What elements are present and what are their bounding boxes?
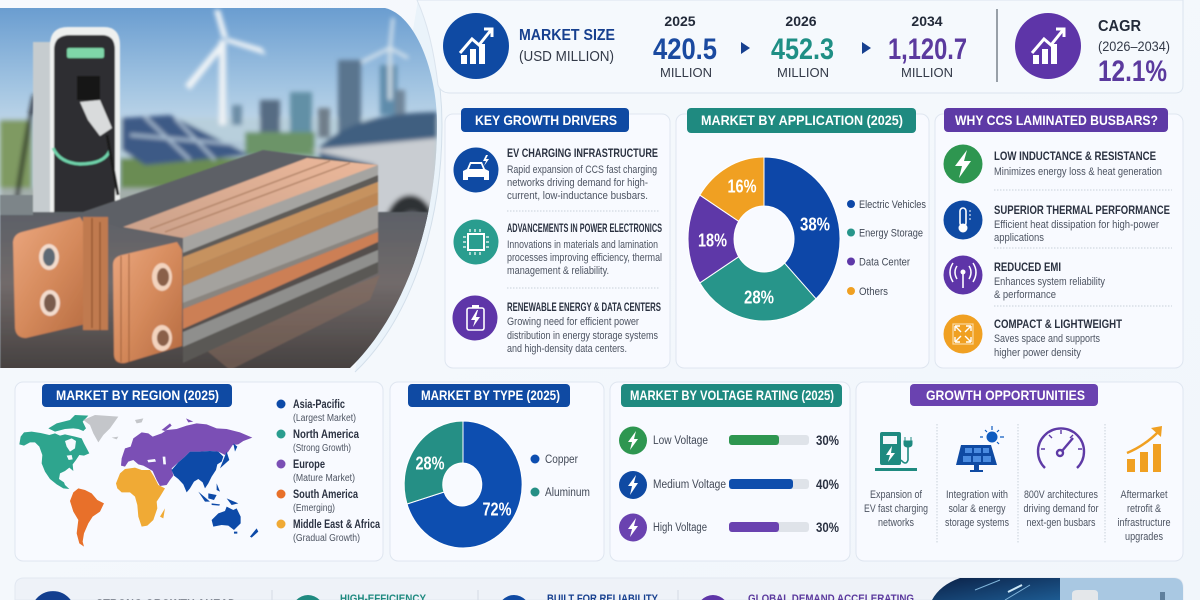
panel: bottom highlights strip xyxy=(15,578,1183,600)
benefit: low inductance: Minimizes energy loss & heat generation xyxy=(994,166,1162,178)
legend xyxy=(847,199,926,298)
value 2025: MILLION xyxy=(660,65,712,80)
legend: (Mature Market) xyxy=(293,473,355,484)
value 2034: MILLION xyxy=(901,65,953,80)
icon: growth bars xyxy=(1127,426,1162,472)
icon: antenna xyxy=(944,256,982,294)
heading xyxy=(621,384,842,407)
opportunity: solar integration: Integration with xyxy=(946,489,1008,501)
heading: MARKET BY REGION (2025) xyxy=(56,387,219,403)
icon: market size chart xyxy=(443,13,509,79)
heading xyxy=(461,108,629,132)
legend: Asia-Pacific xyxy=(293,397,345,411)
benefit: reduced EMI: REDUCED EMI xyxy=(994,262,1061,274)
value 2026 xyxy=(771,13,834,80)
icon: solar panel xyxy=(956,426,1004,472)
donut chart: 38% xyxy=(800,214,830,234)
driver: power electronics: ADVANCEMENTS IN POWER ELECTRONICS xyxy=(507,223,662,235)
icon: car xyxy=(454,148,498,192)
benefit: low inductance: LOW INDUCTANCE & RESISTANCE xyxy=(994,151,1156,163)
highlight: high efficiency xyxy=(296,593,427,600)
row: high voltage: High Voltage xyxy=(653,522,707,534)
icon: speedometer xyxy=(1038,428,1084,468)
donut chart: 28% xyxy=(744,288,774,308)
legend: Europe xyxy=(293,457,325,471)
value 2034: 2034 xyxy=(911,13,943,29)
legend: (Largest Market) xyxy=(293,413,356,424)
panel: why CCS laminated busbars xyxy=(935,108,1183,368)
donut chart xyxy=(688,157,840,321)
donut chart: 16% xyxy=(728,176,756,196)
opportunity: charging networks: networks xyxy=(878,517,914,529)
legend: (Gradual Growth) xyxy=(293,533,360,544)
benefit: reduced EMI: Enhances system reliability xyxy=(994,276,1105,288)
driver: EV charging: Rapid expansion of CCS fast charging xyxy=(507,164,657,176)
value 2025: 2025 xyxy=(664,13,696,29)
arrow xyxy=(741,42,750,54)
icon: CAGR chart xyxy=(1015,13,1081,79)
row: medium voltage: 40% xyxy=(816,476,839,492)
heading: KEY GROWTH DRIVERS xyxy=(475,112,617,128)
CAGR figures: CAGR xyxy=(1098,18,1141,35)
benefit: reduced EMI xyxy=(994,262,1105,301)
opportunity: charging networks xyxy=(864,489,928,529)
heading: MARKET BY TYPE (2025) xyxy=(421,387,560,403)
panel: key growth drivers xyxy=(445,108,670,368)
driver: renewable energy: and high-density data centers. xyxy=(507,343,627,355)
CAGR figures: 12.1% xyxy=(1098,55,1167,88)
opportunity: 800V architectures: driving demand for xyxy=(1024,503,1099,515)
panel: market by region xyxy=(15,382,383,561)
driver: power electronics xyxy=(507,223,662,277)
row: medium voltage: Medium Voltage xyxy=(653,479,726,491)
driver: power electronics: management & reliability. xyxy=(507,265,609,277)
CAGR figures: (2026–2034) xyxy=(1098,39,1170,54)
driver: renewable energy xyxy=(507,302,661,355)
donut chart: 18% xyxy=(698,230,727,250)
panel: market by type xyxy=(390,382,604,561)
heading: WHY CCS LAMINATED BUSBARS? xyxy=(955,112,1158,128)
driver: renewable energy: Growing need for efficient power xyxy=(507,316,639,328)
market size label: MARKET SIZE xyxy=(519,27,615,44)
icon: EV charger xyxy=(875,432,917,471)
value 2034: 1,120.7 xyxy=(888,33,967,66)
legend: Electric Vehicles xyxy=(859,199,926,211)
value 2026: 452.3 xyxy=(771,33,834,66)
row: low voltage: Low Voltage xyxy=(653,435,708,447)
icon: thermometer xyxy=(944,200,982,240)
driver: renewable energy: distribution in energy storage systems xyxy=(507,330,658,342)
driver: EV charging: current, low-inductance busbars. xyxy=(507,190,648,202)
heading: GROWTH OPPORTUNITIES xyxy=(926,387,1085,403)
donut chart: 72% xyxy=(482,500,512,520)
legend: Aluminum xyxy=(545,487,590,499)
panel: market by voltage rating xyxy=(610,382,850,561)
benefit: low inductance xyxy=(994,151,1162,178)
opportunity: charging networks: EV fast charging xyxy=(864,503,928,515)
highlight: built for reliability xyxy=(502,593,659,600)
heading xyxy=(944,108,1168,132)
legend: Middle East & Africa xyxy=(293,517,380,531)
opportunity: aftermarket: Aftermarket xyxy=(1120,489,1168,501)
legend: (Emerging) xyxy=(293,503,335,514)
row: low voltage: 30% xyxy=(816,432,839,448)
opportunity: 800V architectures: next-gen busbars xyxy=(1026,517,1096,529)
benefit: thermal performance: Efficient heat dissipation for high-power xyxy=(994,219,1159,231)
benefit: reduced EMI: & performance xyxy=(994,289,1056,301)
photo strip: data center and charger xyxy=(930,578,1183,600)
benefit: compact: Saves space and supports xyxy=(994,333,1100,345)
legend: Copper xyxy=(545,454,578,466)
panel: market by application xyxy=(676,108,929,368)
row: high voltage: 30% xyxy=(816,519,839,535)
driver: EV charging xyxy=(507,148,658,202)
heading: MARKET BY VOLTAGE RATING (2025) xyxy=(630,387,834,403)
value 2026: MILLION xyxy=(777,65,829,80)
benefit: compact: COMPACT & LIGHTWEIGHT xyxy=(994,319,1122,331)
driver: power electronics: processes improving efficiency, thermal xyxy=(507,252,662,264)
heading xyxy=(910,384,1098,406)
opportunity: solar integration: storage systems xyxy=(945,517,1009,529)
opportunity: solar integration: solar & energy xyxy=(948,503,1006,515)
market size label xyxy=(519,27,615,65)
icon: chip xyxy=(454,220,498,264)
row: high voltage xyxy=(619,514,839,542)
legend: Energy Storage xyxy=(859,228,923,240)
heading xyxy=(687,108,916,133)
heading xyxy=(42,384,232,407)
CAGR figures xyxy=(1098,18,1170,88)
legend: South America xyxy=(293,487,358,501)
legend: Data Center xyxy=(859,256,910,268)
icon: compact arrows xyxy=(944,314,982,354)
value 2026: 2026 xyxy=(785,13,817,29)
panel: market size banner xyxy=(417,0,1183,93)
value 2025: 420.5 xyxy=(653,33,717,66)
icon: bolt xyxy=(944,144,982,184)
benefit: thermal performance xyxy=(994,205,1170,244)
opportunity: aftermarket xyxy=(1118,489,1170,543)
driver: EV charging: networks driving demand for high- xyxy=(507,177,648,189)
legend xyxy=(276,397,380,544)
legend: (Strong Growth) xyxy=(293,443,351,454)
arrow xyxy=(862,42,871,54)
driver: renewable energy: RENEWABLE ENERGY & DATA CENTERS xyxy=(507,302,661,314)
driver: EV charging: EV CHARGING INFRASTRUCTURE xyxy=(507,148,658,160)
opportunity: charging networks: Expansion of xyxy=(870,489,923,501)
value 2025 xyxy=(653,13,717,80)
opportunity: aftermarket: retrofit & xyxy=(1127,503,1162,515)
opportunity: 800V architectures xyxy=(1024,489,1099,529)
opportunity: aftermarket: infrastructure xyxy=(1118,517,1170,529)
heading xyxy=(408,384,570,407)
driver: power electronics: Innovations in materials and lamination xyxy=(507,239,658,251)
legend: North America xyxy=(293,427,359,441)
donut chart: 28% xyxy=(416,454,444,474)
hero photo: busbar with EV charger, wind turbines and city xyxy=(0,8,440,370)
highlight: strong growth xyxy=(35,591,236,600)
row: low voltage xyxy=(619,426,839,454)
opportunity: aftermarket: upgrades xyxy=(1125,531,1163,543)
value 2034 xyxy=(888,13,967,80)
world map xyxy=(19,415,258,547)
opportunity: 800V architectures: 800V architectures xyxy=(1024,489,1098,501)
icon: battery xyxy=(452,296,498,340)
row: medium voltage xyxy=(619,471,839,499)
panel: growth opportunities xyxy=(856,382,1183,561)
benefit: thermal performance: applications xyxy=(994,232,1044,244)
benefit: compact xyxy=(994,319,1122,359)
market size label: (USD MILLION) xyxy=(519,48,614,65)
heading: MARKET BY APPLICATION (2025) xyxy=(701,112,903,128)
legend xyxy=(530,454,590,499)
donut chart xyxy=(404,421,522,548)
legend: Others xyxy=(859,286,888,298)
benefit: compact: higher power density xyxy=(994,347,1081,359)
opportunity: solar integration xyxy=(945,489,1009,529)
